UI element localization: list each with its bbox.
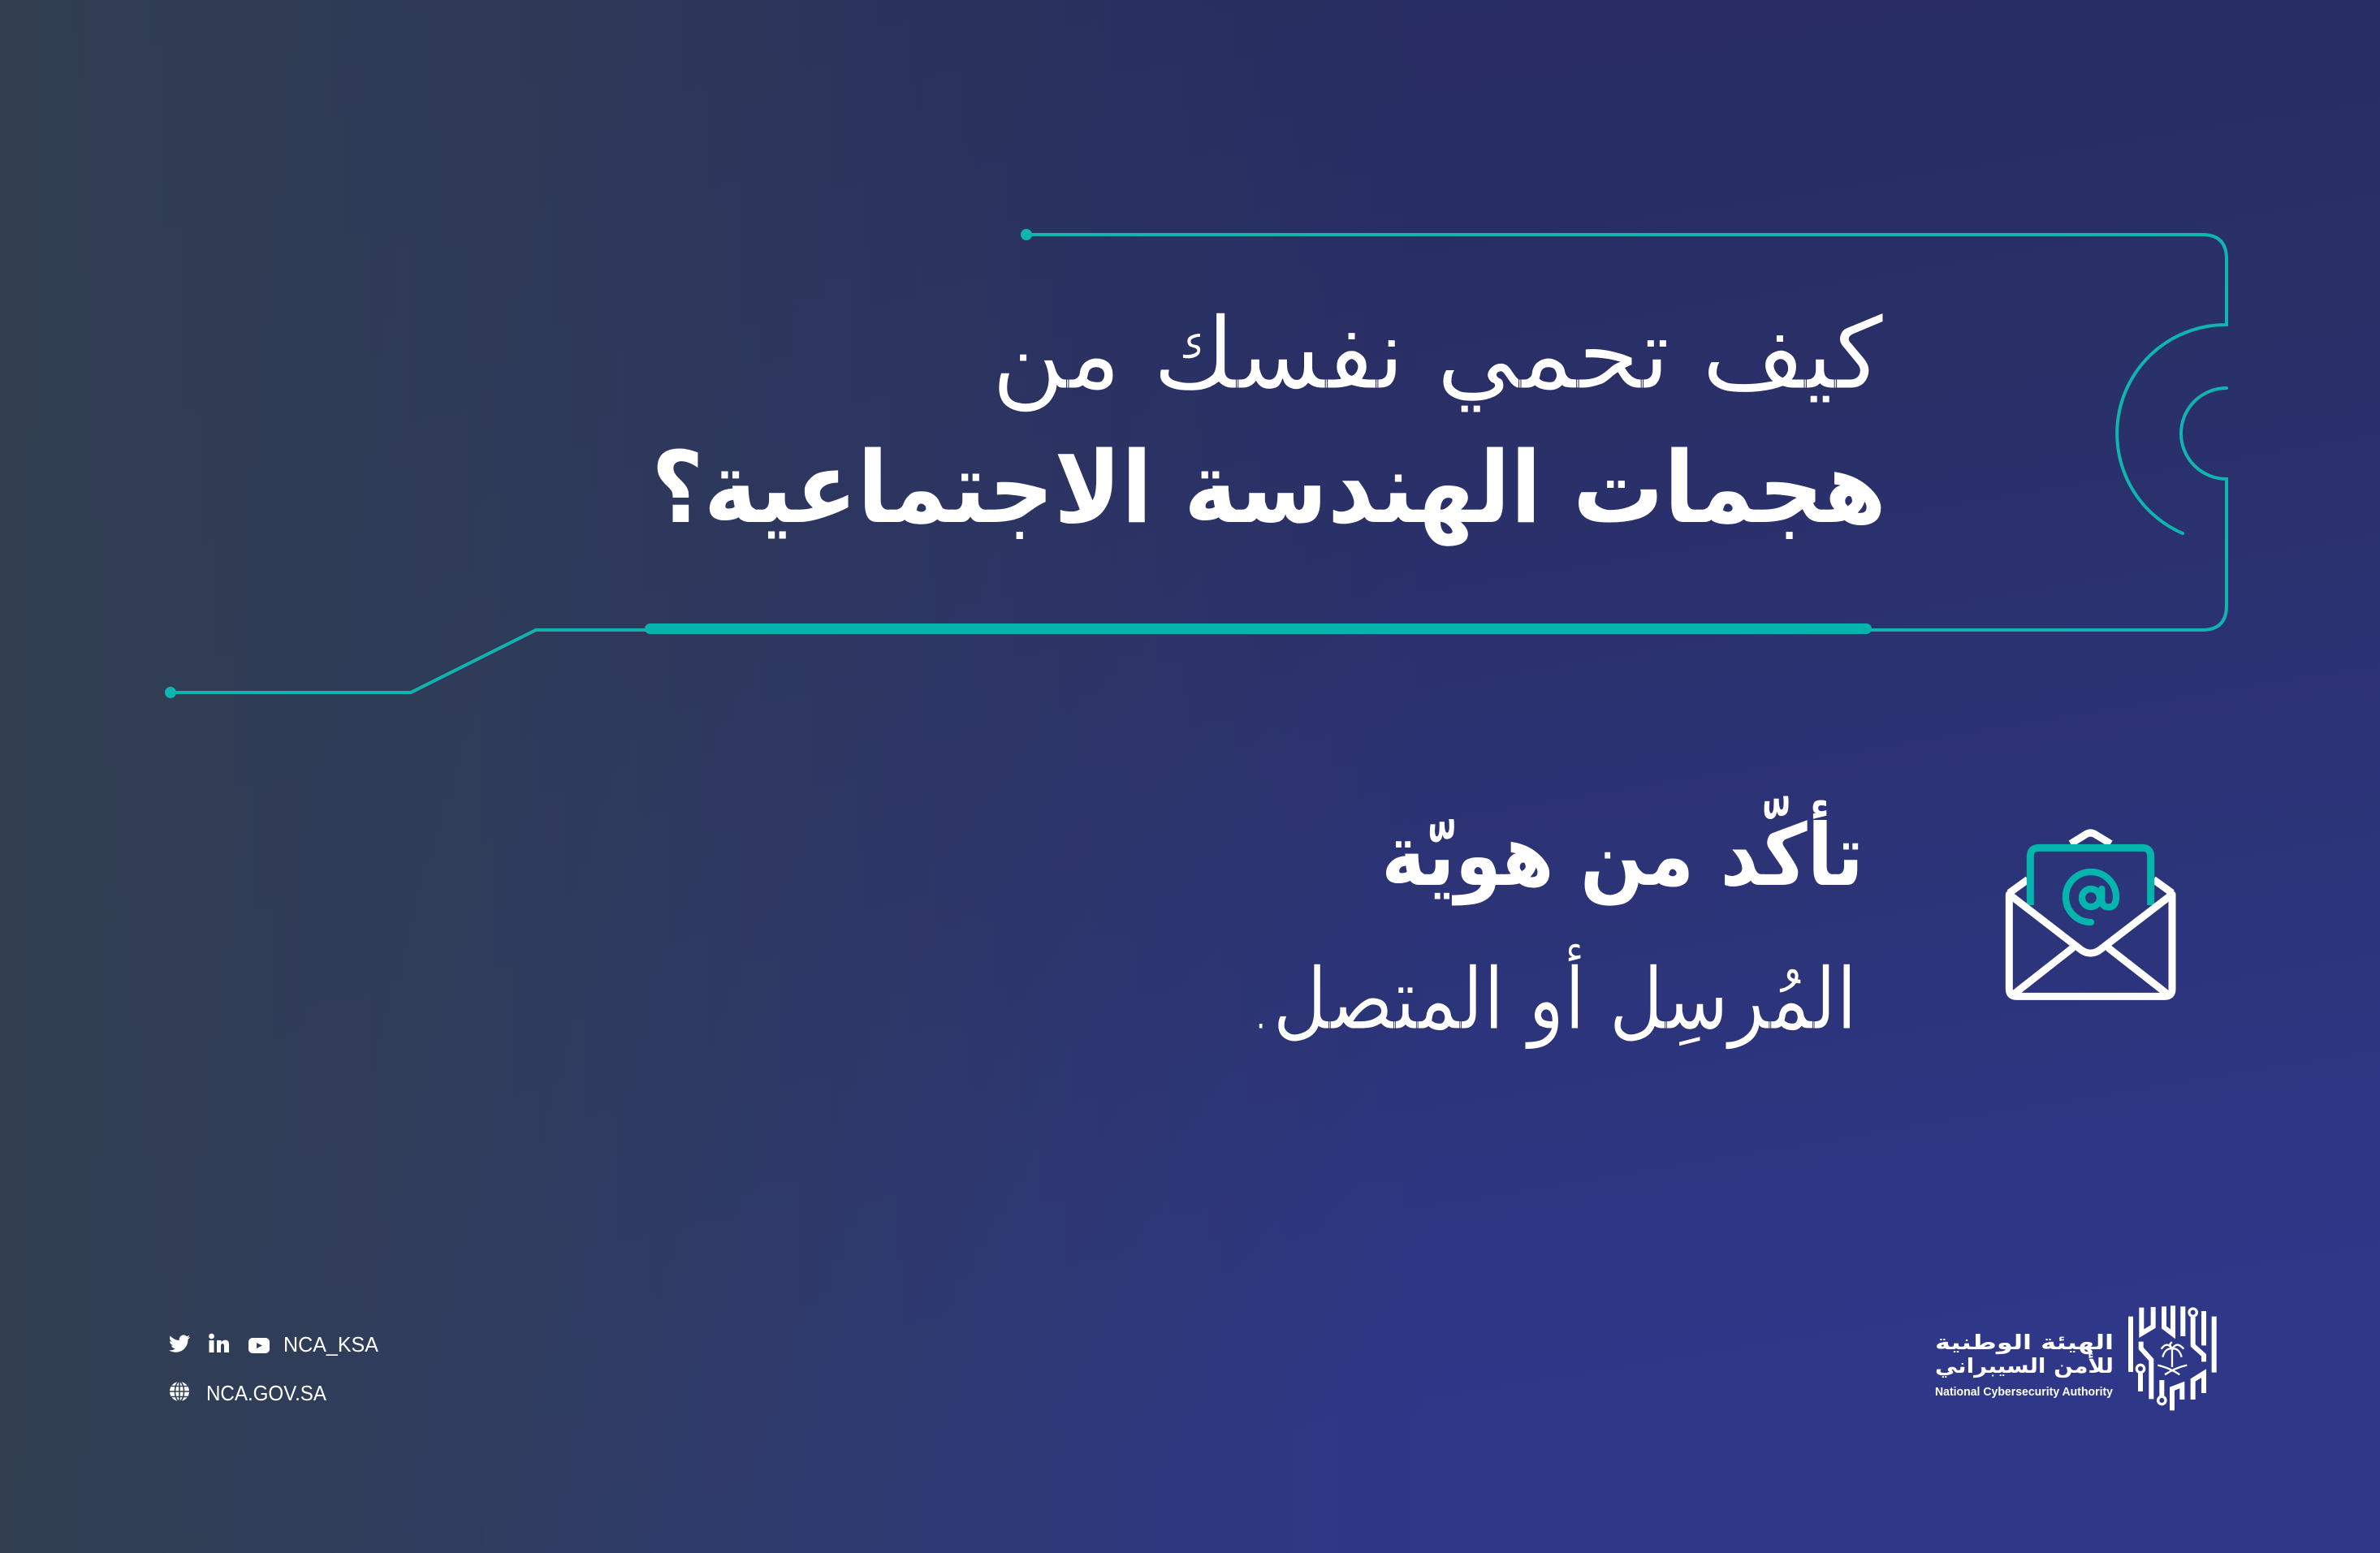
english name: National Cybersecurity Authority [1935, 1386, 2113, 1399]
logo wordmark [1935, 1331, 2114, 1399]
arabic name line 2: للأمن السيبراني [1935, 1353, 2114, 1378]
logo emblem [2131, 1305, 2214, 1410]
thick teal title underline [645, 623, 1872, 634]
social media block [169, 1332, 379, 1405]
title [651, 296, 1886, 546]
social handle: NCA_KSA [283, 1332, 379, 1357]
message text [1249, 796, 1864, 1050]
website: NCA.GOV.SA [206, 1381, 327, 1405]
icon: twitter [169, 1335, 190, 1352]
logo: National Cybersecurity Authority [1935, 1305, 2214, 1410]
circuit frame around title [165, 229, 2227, 698]
message line 2: المُرسِل أو المتصل. [1249, 943, 1857, 1050]
title line 2: هجمات الهندسة الاجتماعية؟ [651, 430, 1886, 546]
icon: youtube [248, 1338, 270, 1353]
icon: linkedin [209, 1334, 229, 1352]
icon: open envelope with at sign [2009, 833, 2172, 996]
arabic name line 1: الهيئة الوطنية [1935, 1331, 2114, 1355]
icon: globe [170, 1382, 189, 1401]
title line 1: كيف تحمي نفسك من [991, 296, 1884, 412]
message line 1: تأكّد من هويّة [1381, 796, 1864, 906]
